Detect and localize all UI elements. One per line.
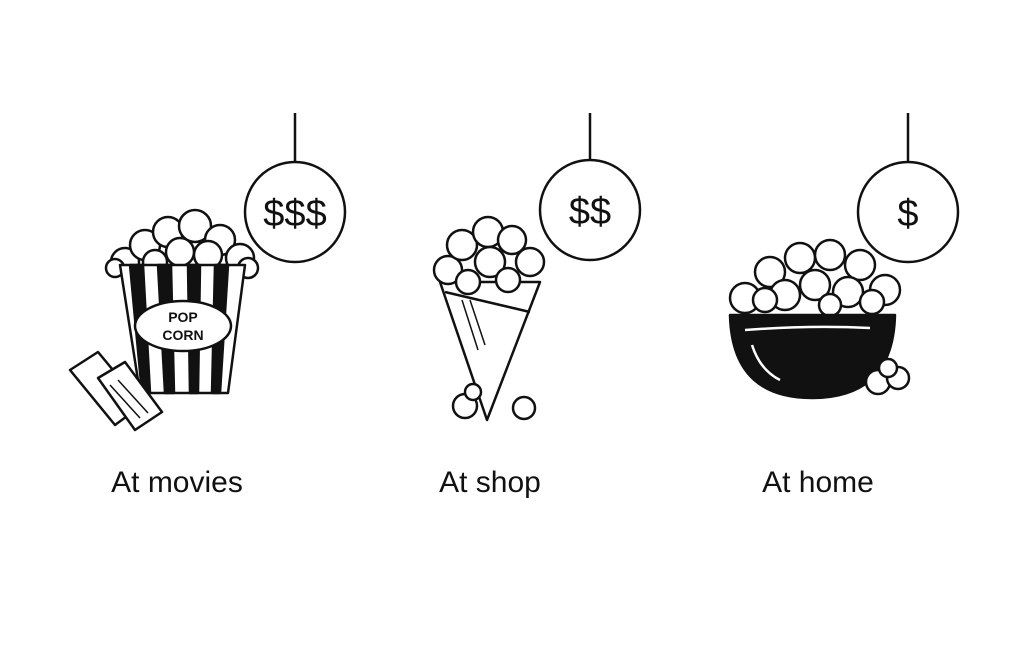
label: at home: At home (762, 466, 874, 499)
price tag: home: $ (897, 193, 919, 235)
price tag: movies: $$$ (263, 193, 327, 235)
price tag: shop (540, 113, 640, 260)
tickets (70, 352, 142, 425)
label: at shop: At shop (439, 466, 541, 499)
icon: popcorn box with tickets: POP (168, 309, 198, 325)
price tag: shop: $$ (569, 191, 611, 233)
box (120, 265, 245, 393)
icon: popcorn box with tickets (70, 210, 258, 430)
label: at movies: At movies (111, 466, 243, 499)
icon: popcorn box with tickets: CORN (162, 327, 204, 343)
icon: popcorn cone (434, 217, 544, 420)
icon: popcorn bowl (730, 240, 909, 398)
price tag: movies (245, 113, 345, 262)
popcorn top (106, 210, 258, 278)
label oval (135, 301, 231, 351)
price tag: home (858, 113, 958, 262)
